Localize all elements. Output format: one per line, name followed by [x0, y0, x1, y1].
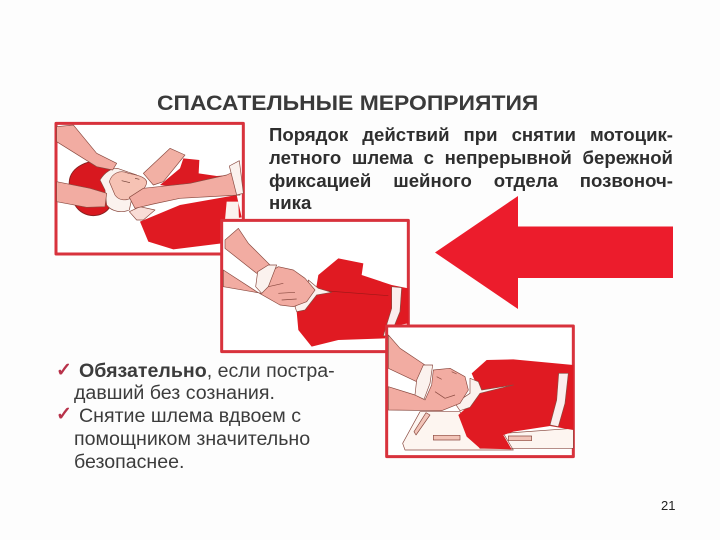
panel 2: supporting the neck [222, 220, 408, 352]
checklist notes: Снятие шлема вдвоем с [79, 405, 301, 427]
shirt [297, 258, 408, 347]
checklist notes: ✓ [56, 404, 72, 425]
collar [129, 207, 155, 220]
arm 2 and hands on head [223, 267, 315, 307]
procedure description text: летного шлема с непрерывной бережной [269, 147, 673, 168]
shirt [140, 195, 242, 249]
arm 1 [225, 228, 270, 273]
panel 1: removing the helmet [56, 123, 243, 254]
checklist notes: Обязательно, если постра- [79, 360, 335, 382]
procedure description text: Порядок действий при снятии мотоцик- [269, 124, 673, 145]
helper arms [57, 125, 117, 170]
procedure description text: фиксацией шейного отдела позвоноч- [269, 170, 673, 191]
spine board [403, 412, 573, 450]
checklist notes: ✓ [56, 360, 72, 381]
title: СПАСАТЕЛЬНЫЕ МЕРОПРИЯТИЯ [157, 91, 538, 115]
helmet [69, 161, 115, 216]
collar [295, 280, 332, 312]
checklist notes: безопаснее. [74, 451, 184, 473]
arms [388, 335, 425, 382]
shirt [458, 359, 573, 449]
procedure description text: ника [269, 192, 311, 213]
patient arm [143, 148, 185, 185]
red arrow pointing left [435, 196, 673, 309]
checklist notes [56, 360, 335, 473]
head with liner [100, 168, 137, 212]
cuff [415, 365, 433, 399]
collar [455, 378, 513, 411]
checklist notes: давший без сознания. [74, 382, 275, 404]
procedure description text [269, 124, 673, 213]
page number: 21 [661, 498, 675, 513]
panel 3: patient on board [387, 326, 573, 457]
cuff [256, 265, 277, 293]
checklist notes: помощником значительно [74, 428, 310, 450]
